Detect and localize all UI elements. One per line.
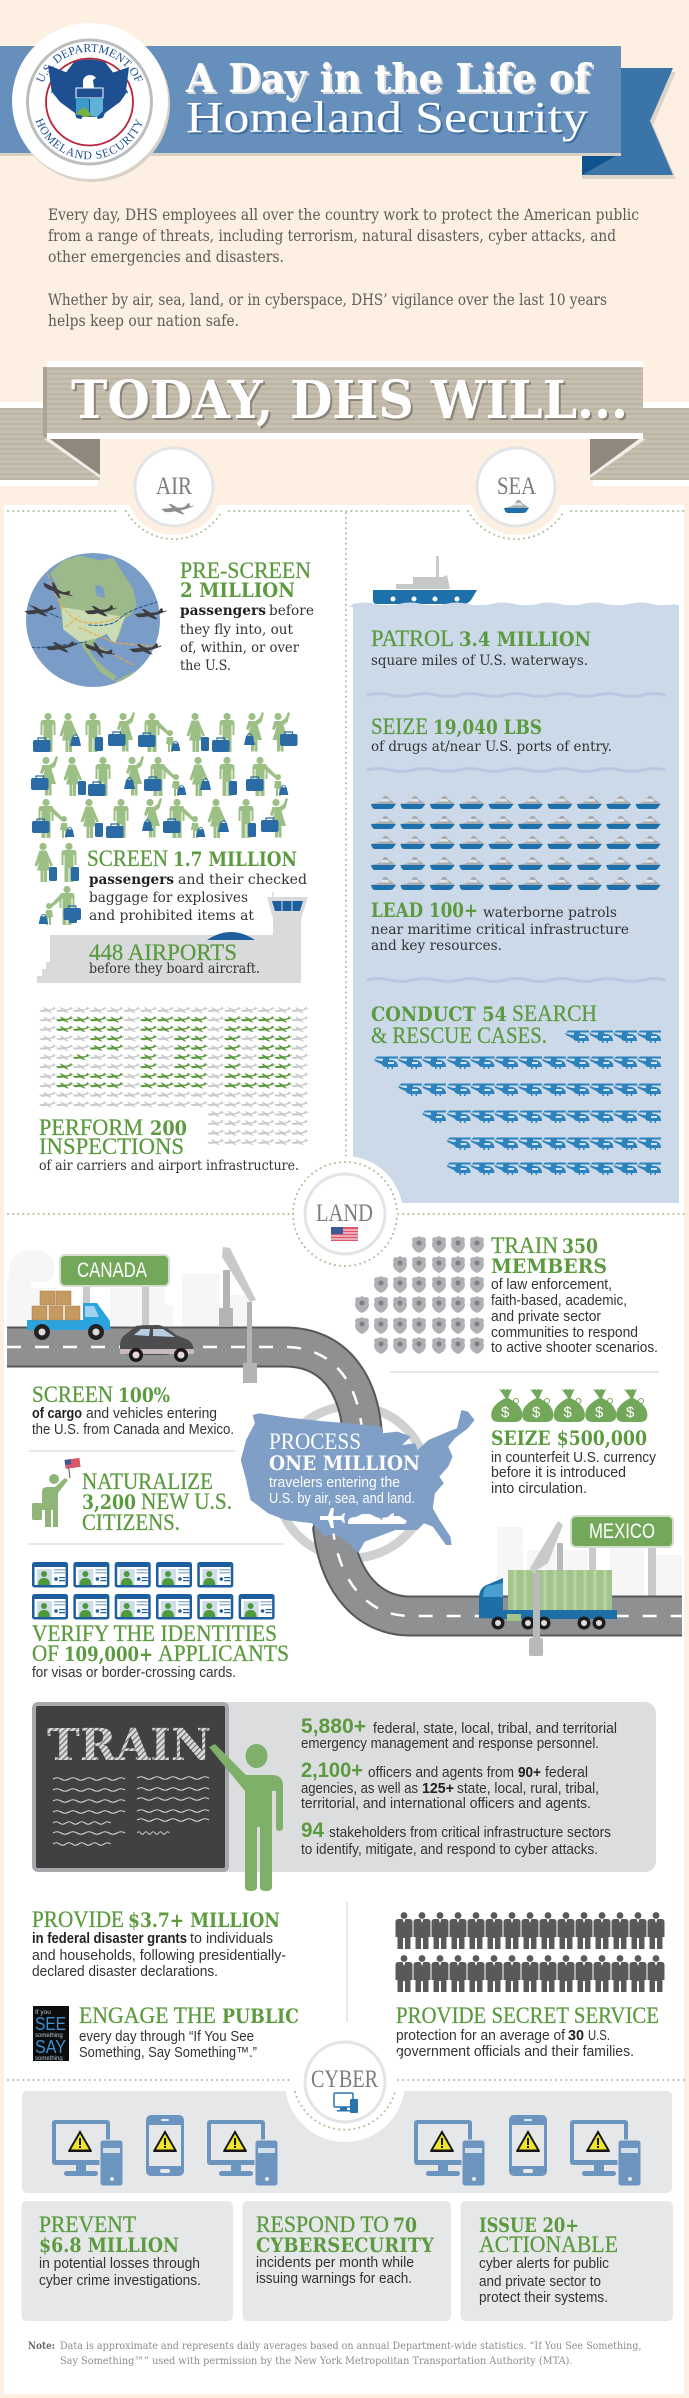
seal: Department of Homeland Security: U.S. DEPARTMENT OF	[36, 44, 143, 82]
icons: 350 trainee badges	[355, 1236, 484, 1354]
text: secret service: U.S.	[588, 2028, 610, 2044]
icon: new citizen with flag	[32, 1458, 81, 1527]
badge: cyber: CYBER	[311, 2066, 378, 2093]
text: train 350 members: communities to respond	[491, 1325, 638, 1341]
panel: prevent: cyber crime investigations.	[39, 2273, 201, 2289]
text: train stats: territorial, and international officers and agents.	[301, 1796, 591, 1812]
sign: Mexico: MEXICO	[589, 1520, 655, 1543]
text: seize $500,000: SEIZE $500,000	[491, 1426, 647, 1450]
text: naturalize: CITIZENS.	[82, 1510, 180, 1535]
text: naturalize	[82, 1469, 232, 1535]
text: verify identities: VERIFY THE IDENTITIES	[32, 1621, 277, 1646]
road	[7, 1347, 682, 1616]
note	[28, 2340, 642, 2367]
text: screen 1.7 million: 448 AIRPORTS	[89, 940, 237, 965]
text: lead 100+: and key resources.	[371, 938, 502, 954]
map: United States	[241, 1410, 475, 1553]
intro text: Whether by air, sea, land, or in cyberspace, DHS’ vigilance over the last 10 years	[48, 291, 607, 309]
text: secret service: 30	[568, 2028, 584, 2044]
icons: plane, car, boat	[320, 1508, 407, 1528]
panel: issue: cyber alerts for public	[479, 2256, 609, 2272]
text: perform 200 inspections: INSPECTIONS	[39, 1134, 184, 1159]
text: secret service	[396, 2003, 659, 2060]
text: naturalize: NATURALIZE	[82, 1469, 213, 1494]
text: seize 19,040 lbs	[371, 714, 612, 755]
chalkboard: TRAIN	[47, 1720, 211, 1771]
lamp post: Mexico road	[529, 1521, 563, 1656]
icon: If You See Something, Say Something poster: SAY	[35, 2037, 66, 2057]
text: process one million: U.S. by air, sea, and land.	[269, 1491, 415, 1507]
panel: issue: and private sector to	[479, 2274, 601, 2290]
panel: respond: incidents per month while	[256, 2255, 414, 2271]
panel: respond: RESPOND TO	[256, 2212, 389, 2237]
text: train stats	[301, 1715, 617, 1858]
text: train 350 members: MEMBERS	[491, 1254, 607, 1278]
icon: If You See Something, Say Something poster: something	[35, 2033, 63, 2039]
icon: If You See Something, Say Something poster: If you	[35, 2009, 51, 2016]
text: lead 100+: waterborne patrols	[483, 905, 617, 921]
text: engage the public: every day through “If You See	[79, 2029, 254, 2045]
text: train 350 members: TRAIN	[491, 1233, 558, 1258]
panel: issue: ISSUE 20+	[479, 2213, 579, 2237]
icons: protected officials	[396, 1912, 664, 1992]
badge: air	[126, 439, 222, 539]
text: patrol 3.4 million: 3.4 MILLION	[459, 627, 591, 651]
car	[120, 1325, 194, 1362]
sign: Canada	[60, 1255, 169, 1327]
text: pre-screen 2 million: of, within, or over	[180, 640, 300, 656]
text: patrol 3.4 million	[371, 626, 591, 669]
text: train stats: 2,100+	[301, 1759, 363, 1782]
text: secret service: PROVIDE SECRET SERVICE	[396, 2003, 659, 2028]
text: perform 200 inspections: PERFORM	[39, 1115, 143, 1140]
panel: prevent: in potential losses through	[39, 2256, 200, 2272]
text: train 350 members: of law enforcement,	[491, 1277, 612, 1293]
text: seize 19,040 lbs: 19,040 LBS	[433, 715, 542, 739]
badge: air: AIR	[156, 473, 192, 500]
text: pre-screen 2 million: passengers	[180, 603, 266, 619]
banner: today, DHS will: TODAY, DHS WILL...	[71, 370, 628, 431]
text: engage the public	[79, 2003, 299, 2061]
text: engage the public: Something, Say Something™.”	[79, 2045, 257, 2061]
text: screen 100%: SCREEN	[32, 1382, 113, 1407]
text: naturalize: 3,200	[82, 1490, 136, 1514]
text: pre-screen 2 million: they fly into, out	[180, 622, 294, 638]
truck: Mexico	[479, 1570, 617, 1630]
illustration: airport terminal	[37, 892, 308, 983]
note: Say Something™” used with permission by the New York Metropolitan Transportation Authority (MTA).	[60, 2355, 572, 2367]
icon: globe with flight paths	[23, 553, 167, 692]
text: screen 1.7 million: before they board aircraft.	[89, 961, 260, 977]
text: perform 200 inspections	[39, 1115, 299, 1174]
intro text: other emergencies and disasters.	[48, 248, 284, 266]
text: seize $500,000: into circulation.	[491, 1481, 587, 1497]
text: seize 19,040 lbs: of drugs at/near U.S. ports of entry.	[371, 739, 612, 755]
note: Data is approximate and represents daily averages based on annual Department-wide statistics. “If You See Something,	[60, 2340, 642, 2352]
text: screen 100%: the U.S. from Canada and Mexico.	[32, 1422, 234, 1438]
text: screen 100%: and vehicles entering	[86, 1406, 217, 1422]
text: secret service: government officials and their families.	[396, 2044, 634, 2060]
text: train 350 members: and private sector	[491, 1309, 601, 1325]
illustration: faint city skyline, Mexico	[497, 1527, 682, 1596]
text: screen 1.7 million: and their checked	[178, 872, 307, 888]
text: process one million: PROCESS	[269, 1429, 361, 1454]
dotted section dividers	[8, 511, 684, 1156]
text: perform 200 inspections: 200	[150, 1116, 187, 1140]
text: verify identities	[32, 1621, 289, 1681]
header ribbon	[0, 46, 676, 179]
panel: issue	[460, 2201, 673, 2321]
text: train stats: federal	[545, 1765, 588, 1781]
text: train 350 members: 350	[562, 1234, 598, 1258]
panel: prevent	[22, 2201, 233, 2321]
lamp post: Canada road	[219, 1247, 256, 1326]
icon: If You See Something, Say Something poster: SEE	[35, 2014, 66, 2034]
text: pre-screen 2 million: before	[269, 603, 314, 619]
title: Homeland Security	[186, 93, 588, 142]
text: disaster grants: to individuals	[190, 1931, 273, 1947]
text: screen 100%	[32, 1382, 234, 1438]
panel: respond	[242, 2201, 451, 2321]
panel: respond: issuing warnings for each.	[256, 2271, 412, 2287]
panel: respond: 70	[393, 2213, 417, 2237]
text: lead 100+: LEAD 100+	[371, 898, 478, 922]
text: train stats: 125+	[422, 1781, 454, 1797]
text: verify identities: OF	[32, 1641, 59, 1666]
text: screen 1.7 million: passengers	[89, 872, 174, 888]
panel: train	[32, 1702, 656, 1872]
truck: Canada	[27, 1291, 110, 1340]
icons: money bags	[491, 1389, 647, 1422]
ring behind map	[276, 1406, 428, 1558]
icons: 54 rescue helicopters	[374, 1030, 661, 1175]
text: train 350 members: faith-based, academic,	[491, 1293, 627, 1309]
text: train stats: 94	[301, 1819, 324, 1842]
panel: issue: protect their systems.	[479, 2290, 608, 2306]
title: A Day in the Life of	[187, 58, 594, 104]
text: disaster grants: and households, following presidentially-	[32, 1948, 286, 1964]
seal: Department of Homeland Security: HOMELAND SECURITY	[35, 118, 142, 160]
title: A Day in the Life of	[185, 56, 592, 102]
text: screen 100%: 100%	[118, 1383, 170, 1407]
badge: cyber	[8, 2022, 684, 2142]
chalkboard	[32, 1702, 229, 1872]
text: train stats: officers and agents from	[368, 1765, 514, 1781]
badge: sea	[468, 439, 564, 539]
text: conduct 54 search and rescue cases: SEARCH	[512, 1001, 597, 1026]
panel: prevent: $6.8 MILLION	[39, 2233, 179, 2257]
text: verify identities: 109,000+	[64, 1642, 153, 1666]
text: perform 200 inspections: of air carriers and airport infrastructure.	[39, 1158, 299, 1174]
text: train stats: emergency management and response personnel.	[301, 1736, 599, 1752]
text: lead 100+	[371, 898, 629, 954]
text: screen 1.7 million: SCREEN	[87, 846, 168, 871]
note: Note:	[28, 2340, 55, 2352]
text: seize $500,000: in counterfeit U.S. currency	[491, 1450, 657, 1466]
intro text: from a range of threats, including terrorism, natural disasters, cyber attacks, and	[48, 227, 616, 245]
text: train stats: 5,880+	[301, 1715, 366, 1738]
panel: respond: CYBERSECURITY	[256, 2233, 435, 2257]
banner: today, DHS will	[0, 361, 689, 486]
text: train 350 members	[491, 1233, 658, 1356]
sign: Canada: CANADA	[77, 1259, 147, 1282]
text: disaster grants: PROVIDE	[32, 1907, 124, 1932]
title: Homeland Security	[188, 95, 590, 144]
title	[185, 56, 594, 144]
text: disaster grants: declared disaster declarations.	[32, 1964, 218, 1980]
text: screen 1.7 million: baggage for explosives	[89, 890, 248, 906]
text: pre-screen 2 million	[180, 558, 314, 674]
icons: 200 aircraft grid	[39, 1007, 309, 1145]
badge: sea: SEA	[497, 473, 536, 500]
text: naturalize: NEW U.S.	[141, 1489, 232, 1514]
panel: issue: ACTIONABLE	[479, 2232, 618, 2257]
text: secret service: protection for an average of	[396, 2028, 566, 2044]
badge: land: LAND	[316, 1200, 373, 1227]
panel: main white body	[4, 505, 684, 2394]
text: conduct 54 search and rescue cases: CONDUCT 54	[371, 1002, 507, 1026]
text: verify identities: APPLICANTS	[158, 1641, 289, 1666]
text: disaster grants: $3.7+ MILLION	[128, 1908, 280, 1932]
text: train stats: stakeholders from critical infrastructure sectors	[329, 1825, 611, 1841]
banner: today, DHS will: TODAY, DHS WILL...	[73, 372, 630, 433]
text: train stats: agencies, as well as	[301, 1781, 418, 1797]
text: pre-screen 2 million: the U.S.	[180, 658, 231, 674]
text: screen 1.7 million	[87, 846, 307, 977]
text: process one million: travelers entering the	[269, 1475, 400, 1491]
text: verify identities: for visas or border-crossing cards.	[32, 1665, 236, 1681]
text: train 350 members: to active shooter scenarios.	[491, 1340, 658, 1356]
text: patrol 3.4 million: square miles of U.S. waterways.	[371, 653, 588, 669]
text: train stats: 90+	[518, 1765, 541, 1781]
text: conduct 54 search and rescue cases: & RESCUE CASES.	[371, 1023, 547, 1048]
text: seize 19,040 lbs: SEIZE	[371, 714, 428, 739]
icons: passengers with baggage	[31, 712, 298, 925]
icon: If You See Something, Say Something poster: something	[35, 2056, 63, 2062]
text: train stats: to identify, mitigate, and respond to cyber attacks.	[301, 1842, 598, 1858]
text: pre-screen 2 million: 2 MILLION	[180, 578, 295, 602]
panel: sea	[349, 602, 679, 1203]
text: seize $500,000	[491, 1426, 657, 1497]
illustration: faint city skyline, Canada	[7, 1250, 250, 1326]
intro text: Every day, DHS employees all over the country work to protect the American public	[48, 206, 639, 224]
text: lead 100+: near maritime critical infrastructure	[371, 922, 629, 938]
lamp post front: Canada road	[243, 1302, 257, 1383]
text: process one million: ONE MILLION	[269, 1451, 420, 1475]
icons: identity cards	[32, 1562, 275, 1620]
text: pre-screen 2 million: PRE-SCREEN	[180, 558, 311, 583]
text: seize $500,000: before it is introduced	[491, 1465, 626, 1481]
text: screen 1.7 million: and prohibited items at	[89, 908, 255, 924]
intro text: helps keep our nation safe.	[48, 312, 239, 330]
text: disaster grants: in federal disaster grants	[32, 1931, 187, 1947]
text: train stats: federal, state, local, tribal, and territorial	[373, 1721, 617, 1737]
text: conduct 54 search and rescue cases	[371, 1001, 597, 1048]
icon: If You See Something, Say Something poster	[33, 2006, 69, 2062]
sign: Mexico	[571, 1516, 673, 1596]
illustration: patrol ship	[373, 556, 477, 604]
text: engage the public: ENGAGE THE	[79, 2003, 216, 2028]
text: screen 1.7 million: 1.7 MILLION	[173, 847, 297, 871]
seal: Department of Homeland Security	[12, 23, 170, 182]
text: process one million	[269, 1429, 420, 1507]
text: engage the public: PUBLIC	[222, 2004, 299, 2028]
badge: land	[8, 1156, 684, 1272]
text: train stats: state, local, rural, tribal,	[457, 1781, 599, 1797]
text: disaster grants	[32, 1907, 286, 1980]
panel: cyber devices	[22, 2091, 672, 2193]
text: screen 100%: of cargo	[32, 1406, 82, 1422]
intro text	[48, 206, 639, 330]
trainer figure	[209, 1744, 283, 1891]
text: patrol 3.4 million: PATROL	[371, 626, 454, 651]
icons: 50 patrol boats	[371, 796, 661, 890]
panel: prevent: PREVENT	[39, 2212, 136, 2237]
